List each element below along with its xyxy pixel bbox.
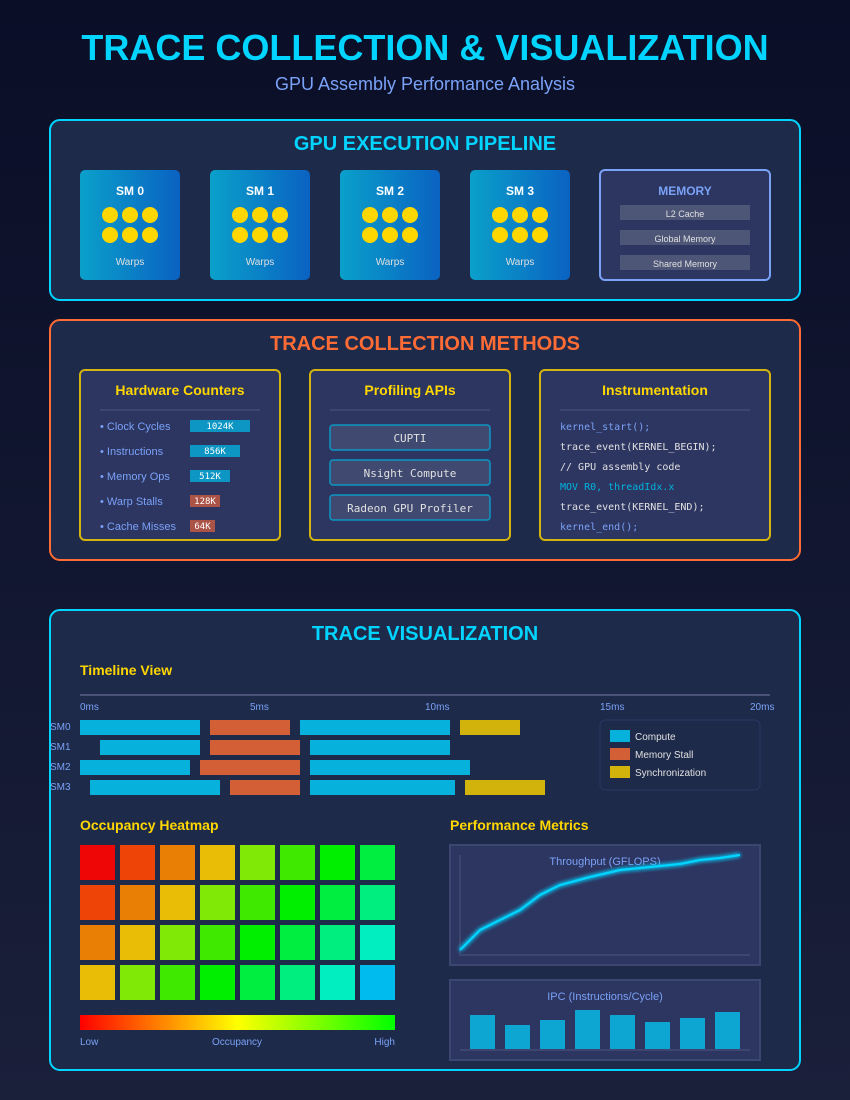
card: hardware counters: 128K (194, 497, 216, 507)
timeline chart: 5ms (250, 702, 269, 713)
card: instrumentation: trace_event(KERNEL_BEGIN); (560, 442, 717, 453)
memory block: Global Memory (654, 234, 716, 244)
SM 0 block (80, 170, 180, 280)
SM 2 block: Warps (376, 257, 404, 268)
heading: trace visualization: TRACE VISUALIZATION (312, 623, 538, 645)
memory block: Shared Memory (653, 259, 718, 269)
heatmap colour scale: Low (80, 1037, 99, 1048)
card: instrumentation: MOV R0, threadIdx.x (560, 482, 674, 493)
SM 0 block: SM 0 (116, 184, 144, 198)
subtitle: GPU Assembly Performance Analysis (275, 74, 575, 94)
memory block: MEMORY (658, 184, 712, 198)
timeline chart: SM2 (50, 762, 71, 773)
timeline chart: SM0 (50, 722, 71, 733)
bar chart: IPC (450, 980, 760, 1060)
card: hardware counters: Hardware Counters (115, 382, 245, 398)
occupancy heatmap (80, 817, 395, 1000)
card: profiling APIs: CUPTI (393, 432, 427, 445)
card: profiling APIs: Nsight Compute (364, 467, 456, 480)
timeline chart: SM1 (50, 742, 71, 753)
timeline legend: Synchronization (635, 768, 706, 779)
panel: trace visualization (50, 610, 800, 1070)
SM 3 block: SM 3 (506, 184, 534, 198)
card: hardware counters: 1024K (206, 422, 234, 432)
card: hardware counters: • Warp Stalls (100, 496, 163, 508)
timeline chart: 0ms (80, 702, 99, 713)
heading: trace collection methods: TRACE COLLECTION METHODS (270, 333, 580, 355)
card: instrumentation: kernel_start(); (560, 422, 650, 433)
card: instrumentation: kernel_end(); (560, 522, 638, 533)
card: instrumentation (540, 370, 770, 540)
SM 2 block: SM 2 (376, 184, 404, 198)
card: profiling APIs: Radeon GPU Profiler (347, 502, 473, 515)
card: hardware counters: • Cache Misses (100, 521, 176, 533)
SM 3 block: Warps (506, 257, 534, 268)
SM 1 block: Warps (246, 257, 274, 268)
card: hardware counters: 512K (199, 472, 221, 482)
card: hardware counters: • Memory Ops (100, 471, 170, 483)
line chart: throughput: Throughput (GFLOPS) (549, 856, 661, 868)
timeline legend: Memory Stall (635, 750, 693, 761)
card: instrumentation: Instrumentation (602, 382, 708, 398)
SM 1 block (210, 170, 310, 280)
card: instrumentation: trace_event(KERNEL_END); (560, 502, 704, 513)
timeline legend: Compute (635, 732, 676, 743)
card: hardware counters: 64K (194, 522, 211, 532)
card: hardware counters: • Clock Cycles (100, 421, 171, 433)
card: hardware counters: • Instructions (100, 446, 164, 458)
timeline legend (600, 720, 760, 790)
timeline chart: SM3 (50, 782, 71, 793)
card: profiling APIs: Profiling APIs (364, 382, 456, 398)
card: hardware counters (80, 370, 280, 540)
memory block (600, 170, 770, 280)
bar chart: IPC: IPC (Instructions/Cycle) (547, 991, 663, 1003)
heatmap colour scale: Occupancy (212, 1037, 262, 1048)
heatmap colour scale (80, 1015, 395, 1048)
card: hardware counters: 856K (204, 447, 226, 457)
panel: trace collection methods (50, 320, 800, 560)
SM 2 block (340, 170, 440, 280)
SM 3 block (470, 170, 570, 280)
timeline chart: 15ms (600, 702, 624, 713)
heatmap colour scale: High (374, 1037, 395, 1048)
memory block: L2 Cache (666, 209, 704, 219)
timeline chart: 10ms (425, 702, 449, 713)
card: instrumentation: // GPU assembly code (560, 462, 680, 473)
timeline chart (50, 662, 774, 795)
occupancy heatmap: Occupancy Heatmap (80, 817, 218, 833)
card: profiling APIs (310, 370, 510, 540)
timeline chart: Timeline View (80, 662, 172, 678)
heading: GPU execution pipeline: GPU EXECUTION PIPELINE (294, 133, 556, 155)
line chart: throughput (450, 845, 760, 965)
title: TRACE COLLECTION & VISUALIZATION (81, 27, 769, 68)
SM 0 block: Warps (116, 257, 144, 268)
SM 1 block: SM 1 (246, 184, 274, 198)
panel: GPU execution pipeline (50, 120, 800, 300)
heading: performance metrics: Performance Metrics (450, 817, 589, 833)
timeline chart: 20ms (750, 702, 774, 713)
